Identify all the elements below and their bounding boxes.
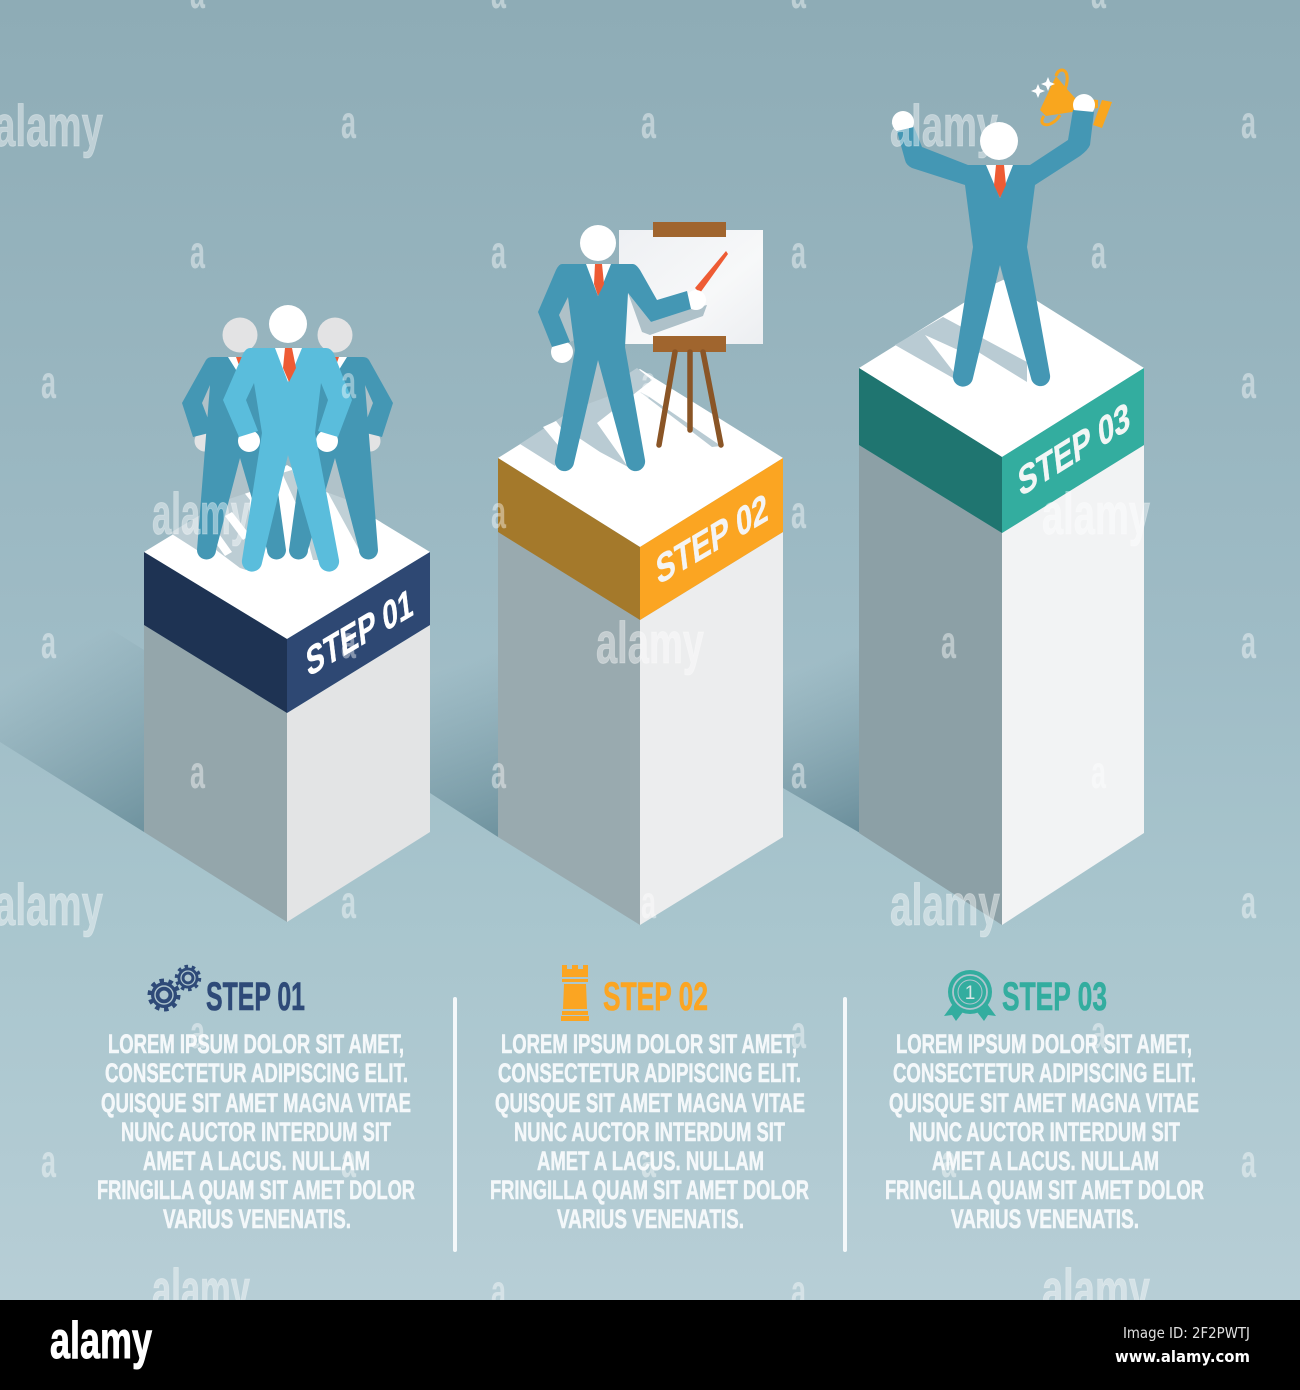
presenter businessman <box>538 225 728 471</box>
watermarks: a <box>491 1265 506 1317</box>
watermarks: a <box>341 616 356 668</box>
figure shadows on step 01 <box>170 458 375 570</box>
watermarks: a <box>791 1265 806 1317</box>
watermarks: a <box>641 96 656 148</box>
text block: step 03: NUNC AUCTOR INTERDUM SIT <box>909 1117 1180 1147</box>
watermarks: a <box>1241 616 1256 668</box>
watermarks: a <box>1091 1006 1106 1058</box>
watermarks: a <box>341 356 356 408</box>
text block: step 03: AMET A LACUS. NULLAM <box>932 1146 1159 1176</box>
watermarks: alamy <box>890 873 1000 938</box>
watermarks: a <box>190 1006 205 1058</box>
watermarks: a <box>41 616 56 668</box>
text block: step 02: LOREM IPSUM DOLOR SIT AMET, <box>501 1029 797 1059</box>
icon: gears <box>150 966 200 1010</box>
heading block: step 01: STEP 01 <box>206 975 305 1019</box>
heading block: step 03: STEP 03 <box>1002 975 1107 1019</box>
front man <box>223 305 352 572</box>
heading block: step 01 <box>150 966 305 1019</box>
icon: ribbon badge <box>944 970 996 1021</box>
column: step 02 <box>498 369 783 925</box>
watermarks: alamy <box>890 94 998 159</box>
watermarks: a <box>491 226 506 278</box>
watermarks: a <box>341 1135 356 1187</box>
watermarks: a <box>41 1135 56 1187</box>
band label: step 03: STEP 03 <box>1016 393 1132 506</box>
watermarks: a <box>1091 226 1106 278</box>
watermarks: a <box>1241 1135 1256 1187</box>
figure shadows on step 02 <box>520 360 721 467</box>
figure shadows on step 03 <box>895 265 1027 382</box>
icon: chess rook <box>561 965 589 1021</box>
watermarks: a <box>641 1135 656 1187</box>
watermarks: a <box>941 616 956 668</box>
footer image id: Image ID: 2F2PWTJ <box>1123 1324 1250 1342</box>
text block: step 02 <box>490 1029 809 1234</box>
watermarks: a <box>491 486 506 538</box>
watermarks: a <box>791 746 806 798</box>
back right man <box>289 318 393 560</box>
column: step 01 <box>144 465 430 922</box>
text block: step 01: VARIUS VENENATIS. <box>163 1204 351 1234</box>
text block: step 02: AMET A LACUS. NULLAM <box>537 1146 764 1176</box>
text block: step 02: CONSECTETUR ADIPISCING ELIT. <box>498 1058 801 1088</box>
text block: step 02: FRINGILLA QUAM SIT AMET DOLOR <box>490 1175 809 1205</box>
text block: step 01: NUNC AUCTOR INTERDUM SIT <box>121 1117 391 1147</box>
footer logo: alamy <box>50 1312 152 1370</box>
winner businessman <box>892 94 1095 387</box>
watermarks: a <box>641 356 656 408</box>
watermarks: a <box>791 486 806 538</box>
watermarks: alamy <box>596 611 704 676</box>
text block: step 02: VARIUS VENENATIS. <box>557 1204 744 1234</box>
text block: step 03 <box>885 1029 1204 1234</box>
watermarks: a <box>1241 356 1256 408</box>
text block: step 03: VARIUS VENENATIS. <box>951 1204 1139 1234</box>
band label: step 02: STEP 02 <box>654 485 770 593</box>
band label: step 01: STEP 01 <box>304 579 415 685</box>
column: step 03 <box>859 279 1144 925</box>
watermarks: a <box>1091 746 1106 798</box>
watermarks: a <box>791 1006 806 1058</box>
text block: step 01: AMET A LACUS. NULLAM <box>143 1146 370 1176</box>
icon: ribbon badge: 1 <box>965 983 975 1004</box>
watermarks: a <box>341 876 356 928</box>
watermarks: alamy <box>152 1258 250 1323</box>
back left man <box>182 318 286 560</box>
presentation board on easel <box>619 222 763 445</box>
heading block: step 02: STEP 02 <box>603 975 708 1019</box>
text block: step 02: QUISQUE SIT AMET MAGNA VITAE <box>495 1088 805 1118</box>
text block: step 01: CONSECTETUR ADIPISCING ELIT. <box>105 1058 408 1088</box>
text block: step 01: LOREM IPSUM DOLOR SIT AMET, <box>108 1029 404 1059</box>
text block: step 01: QUISQUE SIT AMET MAGNA VITAE <box>101 1088 411 1118</box>
footer bar <box>0 1300 1300 1390</box>
watermarks: a <box>491 746 506 798</box>
watermarks: a <box>641 876 656 928</box>
watermarks: a <box>791 226 806 278</box>
watermarks: alamy <box>1042 1258 1150 1323</box>
text block: step 01 <box>97 1029 415 1234</box>
watermarks: a <box>1241 876 1256 928</box>
floor shadows behind columns <box>0 560 860 837</box>
watermarks: a <box>1241 96 1256 148</box>
watermarks: alamy <box>152 482 250 547</box>
watermarks: a <box>190 746 205 798</box>
watermarks: a <box>41 356 56 408</box>
watermarks: alamy <box>1042 482 1150 547</box>
heading block: step 02 <box>561 965 708 1021</box>
footer url: www.alamy.com <box>1115 1347 1250 1366</box>
trophy <box>1031 70 1112 128</box>
watermarks: a <box>190 226 205 278</box>
text block: step 02: NUNC AUCTOR INTERDUM SIT <box>514 1117 785 1147</box>
watermarks: a <box>341 96 356 148</box>
team of three businessmen <box>182 305 393 572</box>
heading block: step 03 <box>944 970 1107 1021</box>
text block: step 01: FRINGILLA QUAM SIT AMET DOLOR <box>97 1175 415 1205</box>
watermarks: a <box>941 1135 956 1187</box>
